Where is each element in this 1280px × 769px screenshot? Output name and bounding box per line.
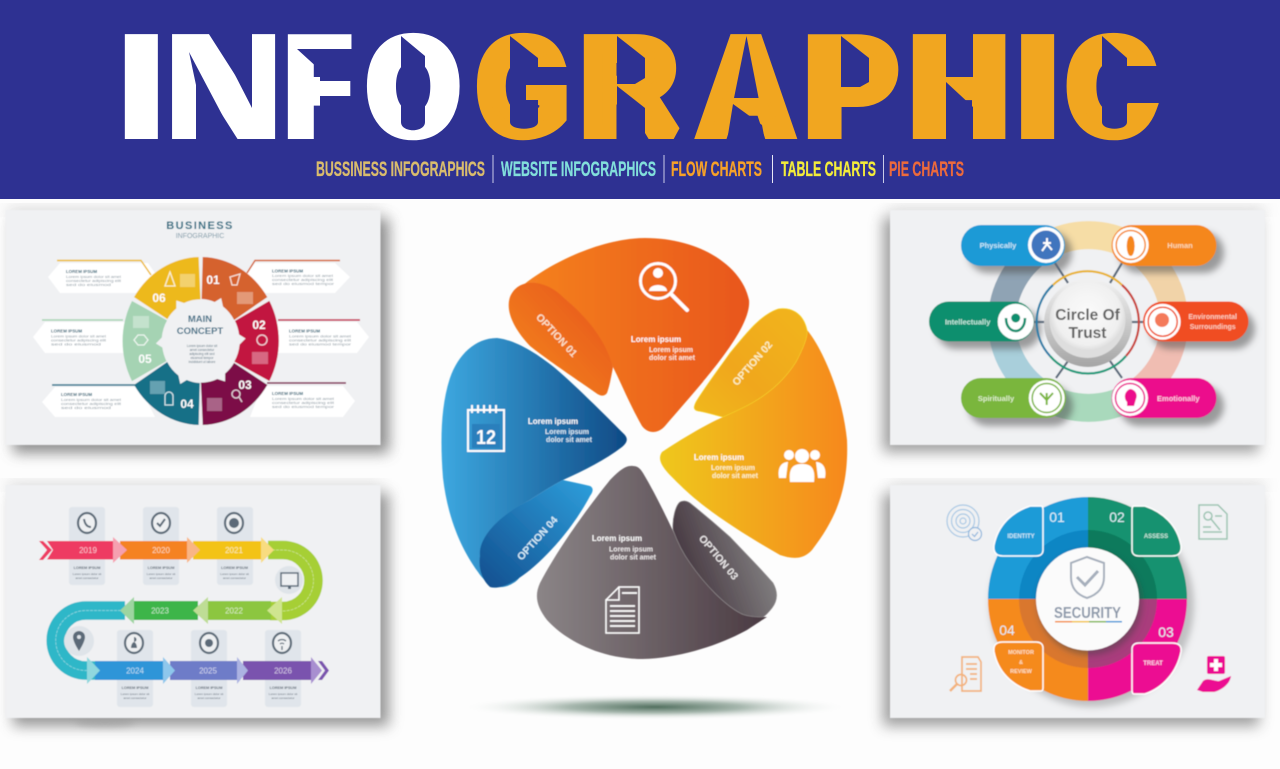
card labels: amet consectetur	[223, 576, 246, 580]
petal: option 02: Lorem ipsum	[711, 465, 755, 472]
year labels: 2023	[151, 606, 169, 616]
wheel numbers: 03	[238, 378, 252, 392]
card labels: Lorem ipsum dolor sit	[195, 692, 224, 696]
panel: business infographic wheel	[5, 205, 389, 453]
step: identity: IDENTITY	[1007, 534, 1035, 540]
petal: option 03	[537, 466, 777, 659]
subtitle links: TABLE CHARTS	[781, 158, 876, 181]
petal: option 04: Lorem ipsum	[545, 429, 589, 436]
petal: option 01: Lorem ipsum	[649, 347, 693, 354]
title: INFO: F	[286, 14, 350, 161]
petal: option 03: dolor sit amet	[610, 554, 657, 562]
card labels	[73, 566, 298, 700]
outer ring	[1002, 235, 1174, 408]
title: GRAPHIC: C	[1068, 12, 1154, 160]
icon: calendar	[468, 405, 504, 451]
card labels: Lorem ipsum dolor sit	[147, 572, 176, 576]
title: GRAPHIC: I	[1019, 13, 1056, 160]
card labels: LOREM IPSUM	[196, 686, 222, 690]
pill: spiritually: Spiritually	[978, 394, 1015, 403]
title: GRAPHIC: R	[582, 12, 676, 160]
card labels: amet consectetur	[197, 696, 221, 700]
wheel text blocks	[133, 274, 268, 411]
callouts: Lorem ipsum dolor sit amet	[51, 334, 106, 338]
callouts: Lorem ipsum dolor sit amet	[272, 274, 333, 278]
main concept: Lorem ipsum dolor sit	[187, 344, 217, 348]
main concept: MAIN	[188, 314, 212, 325]
callouts: consectetur adipiscing elit	[61, 402, 121, 406]
callouts: sed do eiusmod tempor	[272, 282, 336, 286]
subtitle links: WEBSITE INFOGRAPHICS	[501, 158, 656, 181]
callouts: consectetur adipiscing elit	[289, 338, 351, 342]
subtitle links: PIE CHARTS	[889, 158, 964, 181]
step numbers: 04	[999, 622, 1015, 638]
main concept: CONCEPT	[177, 326, 223, 337]
icon: calendar: 12	[476, 427, 496, 449]
title: INFO	[123, 13, 458, 161]
card labels: Lorem ipsum dolor sit	[121, 692, 150, 696]
year labels: 2021	[225, 546, 243, 555]
hub button: Trust	[1069, 325, 1106, 342]
callouts: sed do eiusmod	[66, 283, 111, 287]
callouts: sed do eiusmod	[61, 406, 111, 410]
step numbers: 02	[1109, 509, 1125, 525]
step: monitor and review: &	[1019, 660, 1023, 666]
pill: environmental surroundings: Surroundings	[1190, 324, 1236, 331]
card labels: LOREM IPSUM	[270, 686, 296, 690]
subtitle links: FLOW CHARTS	[671, 158, 762, 181]
year labels: 2020	[152, 546, 170, 555]
security hub: SECURITY	[1054, 605, 1122, 622]
wheel segments	[100, 237, 302, 445]
petal: option 01: dolor sit amet	[649, 355, 696, 362]
panel heading	[166, 220, 234, 240]
hub button	[1044, 279, 1132, 367]
year labels: 2019	[79, 546, 97, 555]
wheel icons	[134, 272, 267, 405]
icon: people	[779, 449, 825, 482]
hub ring	[1037, 271, 1139, 374]
step numbers: 03	[1158, 624, 1174, 640]
callouts: LOREM IPSUM	[51, 328, 82, 334]
wheel numbers: 05	[138, 352, 152, 366]
step numbers: 01	[1049, 509, 1065, 525]
header banner	[0, 0, 1280, 199]
main concept: incididunt ut labore	[189, 360, 216, 364]
petal: option 04	[441, 338, 627, 588]
icon: medical hand	[1197, 656, 1231, 692]
subtitle links: BUSSINESS INFOGRAPHICS	[316, 158, 485, 181]
pill: environmental surroundings: Environmental	[1188, 314, 1237, 321]
connectors	[1034, 263, 1143, 378]
subtitle links	[316, 155, 964, 183]
callouts: consectetur adipiscing elit	[51, 338, 106, 342]
title: INFO: N	[170, 13, 277, 160]
icon: fingerprint	[947, 505, 982, 540]
title: GRAPHIC: P	[806, 13, 896, 161]
wheel numbers: 06	[152, 291, 166, 305]
callouts: LOREM IPSUM	[272, 391, 303, 396]
callouts: Lorem ipsum dolor sit amet	[289, 334, 351, 338]
step: assess: ASSESS	[1144, 534, 1168, 540]
callouts: LOREM IPSUM	[61, 392, 92, 397]
petal: option 02: dolor sit amet	[712, 473, 759, 480]
card labels: Lorem ipsum dolor sit	[269, 692, 298, 696]
petal: option 03: Lorem ipsum	[609, 546, 653, 554]
petal: option 04: dolor sit amet	[546, 437, 593, 444]
petal: option 03: Lorem ipsum	[592, 534, 642, 543]
callouts: Lorem ipsum dolor sit amet	[61, 398, 121, 402]
panel: security	[883, 480, 1266, 726]
panel heading: INFOGRAPHIC	[176, 233, 224, 240]
icon: magnifier person	[640, 264, 687, 310]
icon: document search	[1199, 505, 1227, 539]
pill: environmental surroundings	[1143, 302, 1248, 342]
pill: emotionally: Emotionally	[1157, 394, 1200, 403]
callouts: LOREM IPSUM	[66, 269, 97, 274]
callouts: Lorem ipsum dolor sit amet	[272, 397, 334, 401]
step: identity	[994, 506, 1043, 556]
callouts: LOREM IPSUM	[289, 328, 320, 334]
panel: timeline	[5, 480, 389, 727]
main concept	[177, 314, 223, 364]
step: assess	[1132, 506, 1181, 556]
year labels: 2026	[274, 666, 292, 676]
title: GRAPHIC: A	[701, 13, 791, 161]
year labels: 2025	[199, 666, 217, 676]
step: monitor and review	[994, 642, 1043, 691]
callouts: Lorem ipsum dolor sit amet	[66, 275, 121, 279]
title: GRAPHIC	[478, 12, 1164, 161]
security hub	[1036, 548, 1142, 655]
step: treat: TREAT	[1143, 661, 1163, 667]
security ring	[988, 497, 1187, 701]
card labels: LOREM IPSUM	[122, 686, 148, 690]
card labels: LOREM IPSUM	[148, 566, 174, 570]
petal: option 01: OPTION 01	[533, 312, 579, 360]
petal: option 02: Lorem ipsum	[694, 453, 744, 462]
pill: physically: Physically	[980, 241, 1017, 250]
card labels: amet consectetur	[123, 696, 147, 700]
step: monitor and review: MONITOR	[1008, 650, 1034, 656]
pill: physically	[961, 225, 1065, 266]
year labels	[79, 546, 292, 676]
petal: option 03: OPTION 03	[696, 533, 741, 583]
pill: emotionally	[1112, 378, 1216, 418]
year labels: 2024	[126, 666, 144, 676]
icon: report magnifier	[950, 657, 981, 691]
step: monitor and review: REVIEW	[1010, 669, 1033, 675]
wheel numbers: 01	[206, 273, 220, 287]
card labels: amet consectetur	[271, 696, 295, 700]
callouts: LOREM IPSUM	[272, 268, 303, 274]
petal: option 02: OPTION 02	[730, 339, 775, 388]
callouts: consectetur adipiscing elit	[272, 401, 334, 405]
petal: option 02	[660, 309, 847, 558]
main concept: adipiscing elit sed	[189, 352, 215, 356]
step numbers	[999, 509, 1174, 640]
petal: option 01	[509, 238, 749, 432]
card labels: amet consectetur	[75, 576, 99, 580]
callouts: consectetur adipiscing elit	[272, 278, 333, 282]
title: INFO: O	[368, 14, 458, 161]
callouts: sed do eiusmod	[51, 342, 101, 346]
hub button: Circle Of	[1055, 307, 1121, 324]
callouts: sed do eiusmod tempor	[289, 342, 353, 346]
panel: circle of trust	[883, 205, 1266, 452]
panel heading: BUSINESS	[166, 220, 234, 232]
timeline cards	[69, 507, 301, 707]
step: treat	[1132, 643, 1181, 694]
floor shadow	[460, 694, 850, 720]
callouts: consectetur adipiscing elit	[66, 279, 121, 283]
pill: human: Human	[1167, 241, 1193, 250]
petal: option 04: OPTION 04	[515, 514, 561, 563]
pill: intellectually	[929, 302, 1034, 342]
petal: option 04: Lorem ipsum	[528, 417, 578, 426]
card labels: LOREM IPSUM	[221, 566, 248, 570]
callouts: sed do eiusmod tempor	[272, 405, 336, 409]
year labels: 2022	[225, 606, 243, 616]
petal: option 01: Lorem ipsum	[631, 335, 681, 344]
title: INFO: I	[123, 13, 160, 160]
card labels: amet consectetur	[149, 576, 173, 580]
wheel numbers: 02	[252, 318, 266, 332]
central petal chart	[441, 238, 850, 720]
card labels: LOREM IPSUM	[74, 566, 100, 570]
main concept: amet consectetur	[190, 348, 215, 352]
icon: document	[606, 587, 639, 633]
pill shadows	[936, 232, 1255, 426]
title: GRAPHIC: H	[911, 14, 1007, 161]
pill: intellectually: Intellectually	[945, 318, 991, 326]
timeline icons	[64, 513, 303, 656]
title: GRAPHIC: G	[478, 14, 568, 161]
card labels: Lorem ipsum dolor sit	[73, 572, 102, 576]
wheel numbers: 04	[180, 397, 194, 411]
callouts	[33, 260, 369, 417]
timeline ribbon	[39, 537, 329, 684]
pill: spiritually	[961, 378, 1066, 418]
wheel numbers	[138, 273, 266, 411]
main concept: eiusmod tempor	[191, 356, 214, 360]
card labels: Lorem ipsum dolor sit	[220, 572, 249, 576]
pill: human	[1112, 225, 1216, 266]
